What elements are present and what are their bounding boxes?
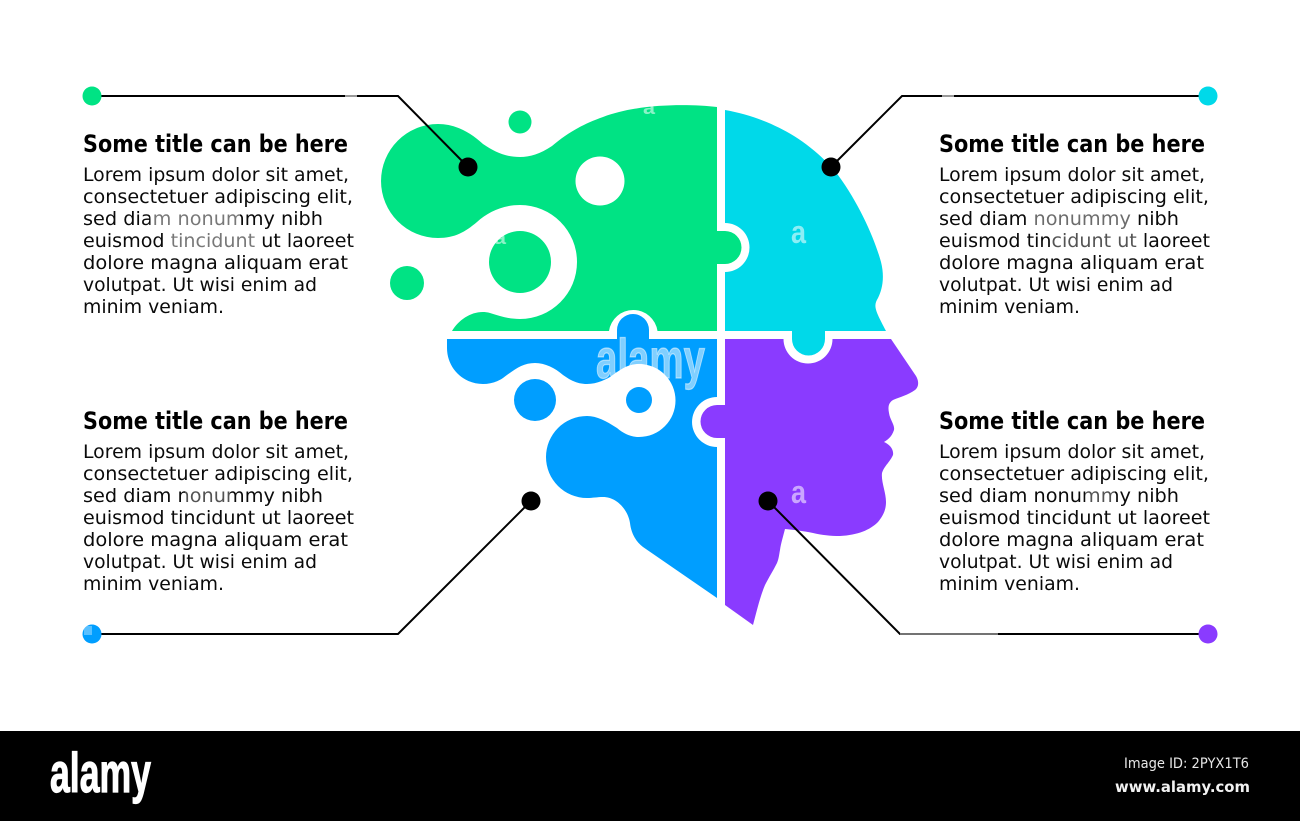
watermark: small letter marks: a [643,98,656,118]
text block: top-right: dolore magna aliquam erat [939,252,1204,274]
connector: bottom-right [758,492,1218,644]
text block: top-right [939,130,1210,318]
text block: bottom-left: consectetuer adipiscing elit, [83,463,353,485]
text block: top-right: volutpat. Ut wisi enim ad [939,274,1173,296]
text block: top-left: Lorem ipsum dolor sit amet, [83,164,349,186]
text block: bottom-left: dolore magna aliquam erat [83,529,348,551]
watermark: small letter marks: a [791,214,806,250]
text block: top-left: minim veniam. [83,296,224,318]
text block: bottom-left: Lorem ipsum dolor sit amet, [83,441,349,463]
text block: top-left: dolore magna aliquam erat [83,252,348,274]
text block: bottom-right: dolore magna aliquam erat [939,529,1204,551]
text block: bottom-right: Some title can be here [939,407,1205,435]
text block: top-right: Some title can be here [939,130,1205,158]
text block: top-right: minim veniam. [939,296,1080,318]
connector: top-right [822,86,1218,176]
text block: bottom-left: sed diam nonummy nibh [83,485,323,507]
puzzle piece: blue bottom-left [447,314,717,598]
text block: bottom-left [83,407,354,595]
watermark: small letter marks: a [494,228,507,248]
text block: bottom-right [939,407,1210,595]
text block: top-left: volutpat. Ut wisi enim ad [83,274,317,296]
watermark: small letter marks: a [791,474,806,510]
watermark: small letter marks [494,98,806,510]
footer url: www.alamy.com [1115,778,1250,796]
watermark: fading over text and lines [84,94,1140,636]
puzzle piece: green top-left brain [381,105,742,331]
text block: top-right: Lorem ipsum dolor sit amet, [939,164,1205,186]
text block: bottom-left: euismod tincidunt ut laoreet [83,507,354,529]
text block: bottom-left: minim veniam. [83,573,224,595]
text block: bottom-right: sed diam nonummy nibh [939,485,1179,507]
text block: top-right: sed diam nonummy nibh [939,208,1179,230]
watermark: alamy over head: alamy [596,327,705,390]
connector: top-left [82,86,478,176]
text block: top-left: Some title can be here [83,130,348,158]
text block: bottom-right: Lorem ipsum dolor sit amet, [939,441,1205,463]
text block: bottom-right: consectetuer adipiscing elit, [939,463,1209,485]
footer logo: alamy [50,741,151,804]
text block: bottom-right: volutpat. Ut wisi enim ad [939,551,1173,573]
text block: top-right: consectetuer adipiscing elit, [939,186,1209,208]
text block: bottom-left: volutpat. Ut wisi enim ad [83,551,317,573]
puzzle piece: purple face profile [701,339,918,625]
text block: top-right: euismod tincidunt ut laoreet [939,230,1210,252]
text block: bottom-left: Some title can be here [83,407,348,435]
footer bar [0,731,1300,821]
text block: bottom-right: minim veniam. [939,573,1080,595]
text block: bottom-right: euismod tincidunt ut laoreet [939,507,1210,529]
footer image id: Image ID: 2PYX1T6 [1124,756,1249,772]
text block: top-left: sed diam nonummy nibh [83,208,323,230]
head puzzle graphic [381,105,918,625]
puzzle piece: cyan top-right brain [725,110,886,356]
text block: top-left [83,130,354,318]
text block: top-left: consectetuer adipiscing elit, [83,186,353,208]
connector: bottom-left [82,492,540,644]
text block: top-left: euismod tincidunt ut laoreet [83,230,354,252]
